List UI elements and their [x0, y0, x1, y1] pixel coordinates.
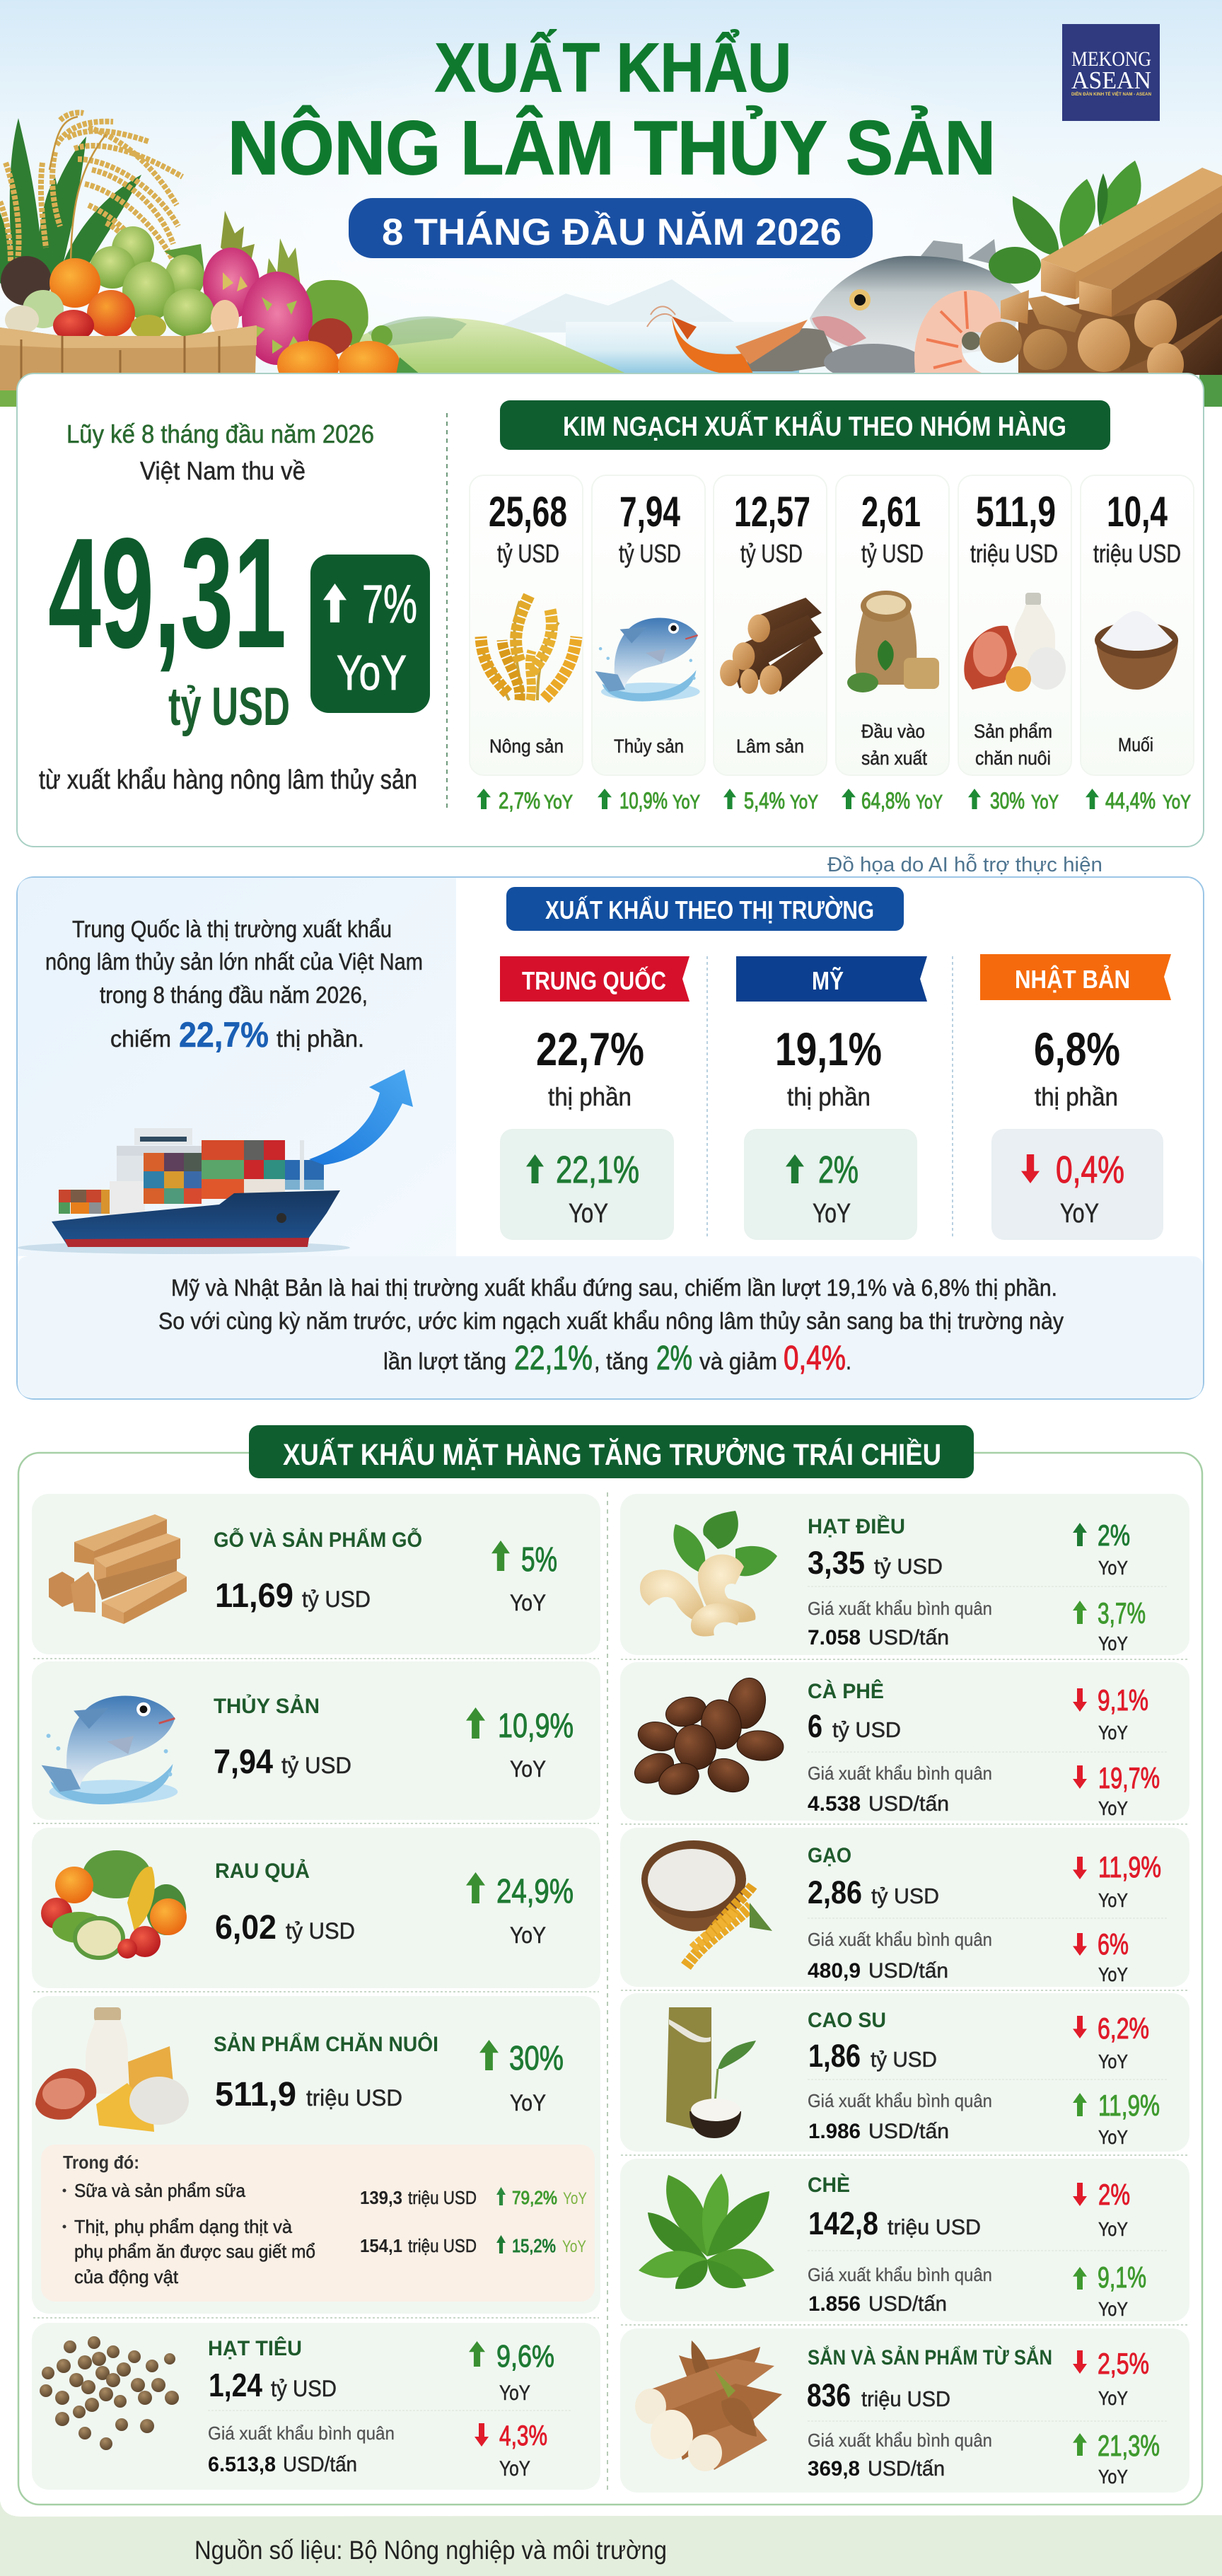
product: seafood: YoY	[510, 1756, 546, 1782]
heading: export value by group: KIM NGẠCH XUẤT KHẨU THEO NHÓM HÀNG	[563, 410, 1066, 442]
arrow: growth	[309, 1069, 413, 1165]
icon: meat and milk	[964, 593, 1066, 692]
card: Lâm sản: 12,57	[734, 488, 810, 535]
product: vegetables and fruit: 24,9%	[496, 1873, 574, 1910]
icon: vegetables	[41, 1850, 187, 1959]
card: Đầu vào sản xuất: Đầu vào	[861, 721, 925, 742]
callout: breakdown: Thịt, phụ phẩm dạng thịt và	[74, 2216, 293, 2237]
footer: data source	[0, 2501, 1222, 2576]
card: Lâm sản: Lâm sản	[736, 736, 804, 757]
icon: peppercorns	[40, 2336, 179, 2450]
icon: fish	[42, 1695, 178, 1804]
product: coffee: tỷ USD	[832, 1717, 901, 1742]
product: coffee: 19,7%	[1098, 1761, 1160, 1794]
market: Japan: 6,8%	[1034, 1023, 1120, 1075]
callout: breakdown: triệu USD	[408, 2187, 477, 2208]
card: Đầu vào sản xuất: 2,61	[861, 488, 921, 535]
text: unit: tỷ USD	[168, 677, 290, 737]
product: livestock products: 30%	[509, 2040, 564, 2077]
product: seafood	[32, 1661, 600, 1820]
title: NÔNG LÂM THỦY SẢN	[228, 105, 996, 190]
product: tea	[620, 2159, 1189, 2321]
product: rubber: CAO SU	[808, 2009, 886, 2032]
product: wood	[32, 1494, 600, 1654]
card: Nông sản: 25,68	[489, 488, 567, 535]
badge: 7% YoY	[310, 555, 430, 713]
panel: total export summary and product groups	[17, 373, 1204, 847]
product: cashew: 3,7%	[1098, 1596, 1146, 1630]
product: wood: 5%	[521, 1541, 557, 1579]
product: cashew: tỷ USD	[874, 1554, 943, 1579]
product: coffee: Giá xuất khẩu bình quân	[808, 1763, 992, 1784]
text: China lead	[45, 916, 423, 1055]
text block: market summary: .	[846, 1348, 851, 1374]
product: cassava	[620, 2328, 1189, 2493]
market: USA: MỸ	[812, 965, 844, 995]
product: tea: YoY	[1098, 2218, 1128, 2240]
product: rice: USD/tấn	[868, 1959, 948, 1983]
card: Muối: 10,4	[1107, 488, 1168, 535]
card: Thủy sản: YoY	[673, 791, 700, 813]
card: Đầu vào sản xuất: tỷ USD	[861, 539, 924, 568]
product: vegetables and fruit	[32, 1828, 600, 1988]
card: Sản phẩm chăn nuôi: Sản phẩm	[974, 721, 1052, 742]
product: rubber	[620, 1993, 1189, 2152]
product: cashew: 3,35	[808, 1545, 865, 1581]
market: China: YoY	[569, 1199, 608, 1229]
product: pepper: YoY	[499, 2457, 530, 2481]
product: rice: 480,9	[808, 1959, 861, 1983]
product: coffee	[620, 1662, 1189, 1821]
text: China lead: chiếm	[110, 1026, 171, 1052]
card: Sản phẩm chăn nuôi: triệu USD	[970, 539, 1058, 568]
product: pepper: YoY	[499, 2381, 530, 2405]
card: Đầu vào sản xuất: YoY	[916, 791, 943, 813]
logo: Mekong ASEAN: ASEAN	[1071, 66, 1151, 94]
product: cassava: 369,8	[808, 2457, 860, 2481]
card: Muối: triệu USD	[1093, 539, 1181, 568]
product: tea: USD/tấn	[868, 2292, 947, 2316]
product: cashew: YoY	[1098, 1632, 1128, 1654]
callout: breakdown: triệu USD	[408, 2235, 477, 2256]
icon: sawn timber	[49, 1514, 187, 1624]
product: rice: 2,86	[808, 1874, 862, 1910]
product: pepper: tỷ USD	[271, 2376, 337, 2401]
product: pepper	[32, 2323, 600, 2490]
product: cassava: USD/tấn	[868, 2457, 945, 2481]
product: rice: GẠO	[808, 1844, 851, 1867]
product: cassava: YoY	[1098, 2466, 1128, 2488]
market: USA	[736, 956, 927, 1240]
product: pepper: 9,6%	[496, 2339, 554, 2374]
text: China lead: Trung Quốc là thị trường xuất khẩu	[72, 916, 392, 942]
panel: mixed-growth products	[18, 1425, 1202, 2505]
heading: exports by market: XUẤT KHẨU THEO THỊ TRƯỜNG	[545, 895, 874, 924]
hero banner: landscape background	[0, 0, 1222, 407]
illustration: seafood	[647, 239, 1022, 381]
market: USA: thị phần	[787, 1082, 871, 1111]
market: USA: YoY	[813, 1199, 851, 1229]
product: rubber: USD/tấn	[868, 2120, 949, 2143]
illustration: timber and leaves	[979, 161, 1222, 385]
text block: market summary: lần lượt tăng	[383, 1348, 506, 1374]
credit note: Đồ họa do AI hỗ trợ thực hiện	[827, 853, 1102, 876]
product: tea: YoY	[1098, 2298, 1128, 2320]
market: Japan	[980, 954, 1171, 1240]
card: Lâm sản: 5,4%	[744, 788, 785, 813]
callout: breakdown	[41, 2145, 595, 2302]
card: Muối: 44,4%	[1105, 788, 1156, 813]
text block: market summary: 22,1%	[514, 1340, 593, 1377]
product group cards	[470, 475, 1194, 775]
market: USA: 2%	[818, 1149, 859, 1191]
product: tea: Giá xuất khẩu bình quân	[808, 2264, 992, 2285]
logo: Mekong ASEAN	[1062, 24, 1160, 121]
product: vegetables and fruit: RAU QUẢ	[215, 1859, 310, 1883]
product: pepper: HẠT TIÊU	[208, 2336, 302, 2360]
card: Thủy sản: tỷ USD	[619, 539, 681, 568]
product: rubber: 11,9%	[1098, 2089, 1160, 2122]
logo: Mekong ASEAN: MEKONG	[1071, 47, 1151, 71]
callout: breakdown: Trong đó:	[63, 2152, 139, 2173]
product: rice: Giá xuất khẩu bình quân	[808, 1929, 992, 1950]
market: USA: 19,1%	[775, 1023, 882, 1075]
product: cashew: USD/tấn	[868, 1626, 949, 1649]
product: coffee: YoY	[1098, 1722, 1128, 1744]
product: tea: 142,8	[808, 2205, 878, 2241]
product: cashew: YoY	[1098, 1557, 1128, 1579]
product: livestock products: 511,9	[215, 2076, 296, 2113]
card: Muối: YoY	[1163, 791, 1191, 813]
product: seafood: 10,9%	[498, 1707, 574, 1745]
badge: 7% YoY: YoY	[337, 645, 407, 700]
text: China lead: nông lâm thủy sản lớn nhất của Việt Nam	[45, 948, 423, 975]
badge: 7% YoY: 7%	[362, 574, 417, 634]
card: Nông sản: tỷ USD	[497, 539, 559, 568]
text block: market summary: , tăng	[594, 1348, 648, 1374]
text block: market summary	[18, 1256, 1203, 1398]
product: rice: YoY	[1098, 1889, 1128, 1911]
product: wood: YoY	[510, 1590, 546, 1615]
product: rubber: Giá xuất khẩu bình quân	[808, 2090, 992, 2111]
logo: Mekong ASEAN: DIỄN ĐÀN KINH TẾ VIỆT NAM - ASEAN	[1071, 91, 1151, 97]
product: cassava: 21,3%	[1098, 2429, 1160, 2462]
icon: rubber tree	[666, 2007, 756, 2138]
product: vegetables and fruit: tỷ USD	[286, 1918, 355, 1944]
product: seafood: THỦY SẢN	[214, 1694, 320, 1718]
text block: market summary: So với cùng kỳ năm trước, ước kim ngạch xuất khẩu nông lâm thủy sản sang ba thị trường này	[158, 1308, 1064, 1334]
product: pepper: 6.513,8	[208, 2453, 276, 2476]
market: China: 22,1%	[556, 1149, 639, 1191]
product: cassava: SẮN VÀ SẢN PHẨM TỪ SẮN	[808, 2345, 1052, 2369]
icon: coffee beans	[630, 1674, 785, 1800]
title	[228, 29, 996, 190]
heading: mixed-growth products	[249, 1425, 974, 1478]
product: rice: YoY	[1098, 1963, 1128, 1985]
product: rubber: 6,2%	[1098, 2012, 1149, 2045]
card: Nông sản: YoY	[544, 791, 573, 813]
card: Sản phẩm chăn nuôi: chăn nuôi	[975, 748, 1051, 769]
callout: breakdown: 154,1	[360, 2235, 402, 2256]
text: China lead: 22,7%	[179, 1015, 269, 1055]
callout: breakdown: của động vật	[74, 2266, 179, 2287]
product: tea: 1.856	[808, 2292, 861, 2316]
card: Thủy sản: Thủy sản	[614, 736, 684, 757]
product: rubber: tỷ USD	[871, 2047, 937, 2072]
card: Thủy sản: 7,94	[619, 488, 680, 535]
product: rice: 11,9%	[1098, 1850, 1161, 1884]
card: Sản phẩm chăn nuôi: 511,9	[976, 488, 1056, 535]
product: wood: GỖ VÀ SẢN PHẨM GỖ	[214, 1528, 422, 1552]
product: vegetables and fruit: YoY	[510, 1922, 546, 1948]
market: Japan: 0,4%	[1056, 1149, 1124, 1191]
callout: breakdown: 139,3	[360, 2187, 402, 2208]
text block: market summary: Mỹ và Nhật Bản là hai thị trường xuất khẩu đứng sau, chiếm lần lượt 19,1% và 6,8% thị phần.	[171, 1275, 1057, 1301]
card: Thủy sản: 10,9%	[619, 788, 668, 813]
text: China lead: trong 8 tháng đầu năm 2026,	[100, 982, 368, 1008]
icon: cashew	[640, 1511, 777, 1637]
product: coffee: 4.538	[808, 1792, 861, 1816]
product: vegetables and fruit: 6,02	[215, 1909, 277, 1946]
product: rubber: YoY	[1098, 2126, 1128, 2148]
product: tea: 9,1%	[1098, 2261, 1146, 2294]
product: seafood: tỷ USD	[281, 1753, 351, 1778]
card: Lâm sản: YoY	[790, 791, 818, 813]
card: Nông sản	[477, 488, 576, 813]
product: livestock products	[32, 1996, 600, 2314]
product: livestock products: YoY	[510, 2090, 546, 2116]
product: rubber: 1,86	[808, 2038, 861, 2074]
heading: exports by market	[506, 887, 904, 931]
text: Vietnam earns: Việt Nam thu về	[140, 456, 306, 485]
illustration: cargo ship	[18, 1128, 350, 1254]
heading: mixed-growth products: XUẤT KHẨU MẶT HÀNG TĂNG TRƯỞNG TRÁI CHIỀU	[283, 1437, 941, 1472]
icon: tea leaves	[639, 2174, 774, 2289]
title: XUẤT KHẨU	[435, 29, 791, 106]
product: cashew	[620, 1494, 1189, 1655]
product: coffee: 9,1%	[1098, 1683, 1148, 1717]
card: Sản phẩm chăn nuôi: 30%	[990, 788, 1025, 813]
product: coffee: 6	[808, 1708, 822, 1744]
icon: rice	[481, 596, 576, 700]
product: seafood: 7,94	[214, 1744, 273, 1781]
product: cashew: Giá xuất khẩu bình quân	[808, 1598, 992, 1619]
product: wood: tỷ USD	[302, 1586, 371, 1612]
text block: market summary: 2%	[656, 1340, 692, 1377]
card: Sản phẩm chăn nuôi	[964, 488, 1066, 813]
illustration: rice stalks and leaves	[0, 112, 182, 297]
product: tea: 2%	[1098, 2178, 1130, 2211]
panel: exports by market	[17, 877, 1204, 1399]
callout: breakdown: YoY	[562, 2237, 586, 2256]
product: livestock products: triệu USD	[306, 2085, 402, 2111]
subtitle pill: 8 THÁNG ĐẦU NĂM 2026	[382, 211, 842, 253]
big number: total: 49,31	[48, 506, 286, 681]
card: Muối	[1086, 488, 1191, 813]
card: Lâm sản: tỷ USD	[740, 539, 803, 568]
card: Nông sản: Nông sản	[489, 736, 564, 757]
text: cumulative label: Lũy kế 8 tháng đầu năm 2026	[66, 419, 374, 448]
subtitle pill	[349, 198, 873, 258]
icon: rice bowl	[641, 1840, 772, 1966]
product: wood: 11,69	[215, 1577, 293, 1615]
icon: salt bowl	[1095, 611, 1178, 690]
icon: cassava roots	[635, 2340, 782, 2471]
text: China lead: thị phần.	[277, 1026, 364, 1052]
card: Đầu vào sản xuất: 64,8%	[861, 788, 910, 813]
product: coffee: YoY	[1098, 1797, 1128, 1819]
footer: data source: Nguồn số liệu: Bộ Nông nghiệp và môi trường	[194, 2536, 667, 2565]
product: pepper: Giá xuất khẩu bình quân	[208, 2423, 395, 2444]
callout: breakdown: YoY	[563, 2189, 587, 2208]
callout: breakdown: 15,2%	[512, 2235, 556, 2256]
product: cashew: 7.058	[808, 1626, 861, 1649]
callout: breakdown: 79,2%	[512, 2187, 557, 2208]
card: Đầu vào sản xuất: sản xuất	[861, 748, 927, 769]
icon: fish	[595, 617, 700, 702]
market: Japan: NHẬT BẢN	[1015, 964, 1130, 994]
product: cassava: triệu USD	[861, 2386, 950, 2411]
market: China: 22,7%	[536, 1023, 644, 1075]
text block: market summary: 0,4%	[784, 1340, 846, 1377]
product: cassava: 2,5%	[1098, 2347, 1149, 2380]
product: cassava: YoY	[1098, 2387, 1128, 2409]
product: cassava: Giá xuất khẩu bình quân	[808, 2430, 992, 2451]
card: Thủy sản	[595, 488, 700, 813]
card: Muối: Muối	[1118, 734, 1153, 755]
product: pepper: 1,24	[209, 2367, 262, 2403]
product: coffee: CÀ PHÊ	[808, 1679, 884, 1703]
illustration: fruit basket	[0, 211, 421, 390]
card: Sản phẩm chăn nuôi: YoY	[1031, 791, 1059, 813]
card: Nông sản: 2,7%	[499, 788, 540, 813]
card: Lâm sản	[720, 488, 823, 813]
product: pepper: 4,3%	[499, 2420, 547, 2452]
callout: breakdown: Sữa và sản phẩm sữa	[74, 2180, 246, 2201]
product: rice: tỷ USD	[871, 1884, 939, 1908]
icon: sack	[847, 591, 939, 692]
product: tea: triệu USD	[888, 2215, 981, 2239]
product: coffee: USD/tấn	[868, 1792, 949, 1816]
product: rubber: 1.986	[808, 2120, 861, 2143]
product: cashew: 2%	[1098, 1519, 1130, 1552]
icon: dairy and meat	[35, 2007, 189, 2132]
product: livestock products: SẢN PHẨM CHĂN NUÔI	[214, 2032, 438, 2056]
icon: logs	[720, 598, 823, 695]
heading: export value by group	[500, 400, 1110, 450]
product: tea: CHÈ	[808, 2173, 850, 2197]
market: Japan: thị phần	[1035, 1082, 1118, 1111]
product: pepper: USD/tấn	[283, 2453, 357, 2476]
text block: market summary: và giảm	[699, 1348, 777, 1374]
market: Japan: YoY	[1060, 1199, 1099, 1229]
market: China	[500, 956, 689, 1240]
product: cashew: HẠT ĐIỀU	[808, 1514, 905, 1538]
product: rubber: YoY	[1098, 2050, 1128, 2072]
product: rice: 6%	[1098, 1927, 1129, 1961]
product: cassava: 836	[807, 2377, 851, 2413]
text: from exports: từ xuất khẩu hàng nông lâm thủy sản	[39, 765, 417, 795]
callout: breakdown: phụ phẩm ăn được sau giết mổ	[74, 2241, 315, 2262]
market: China: TRUNG QUỐC	[522, 965, 666, 995]
market: China: thị phần	[548, 1082, 632, 1111]
product: rice	[620, 1828, 1189, 1987]
card: Đầu vào sản xuất	[842, 488, 943, 813]
